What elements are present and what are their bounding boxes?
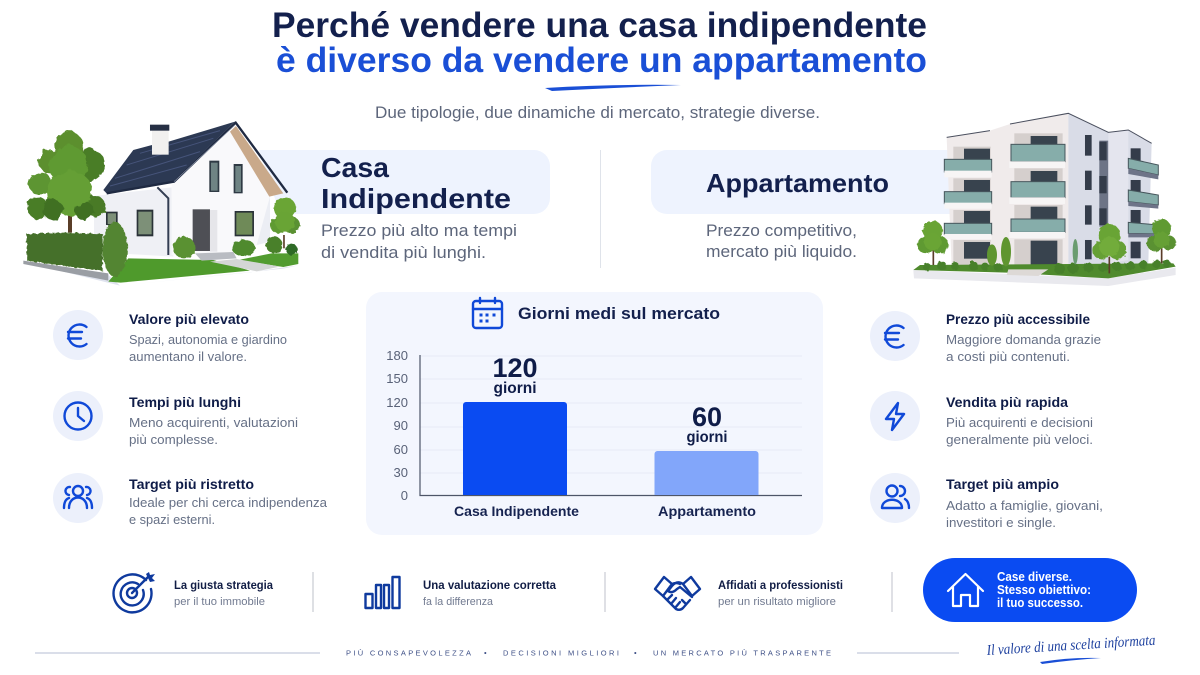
item: valore più elevato <box>53 310 287 364</box>
title: Perché vendere una casa indipendente <box>272 6 927 45</box>
item: valore più elevato: Valore più elevato <box>129 311 249 327</box>
item: vendita più rapida: Vendita più rapida <box>946 394 1068 410</box>
item: target più ristretto <box>53 473 328 527</box>
footer tagline: • <box>484 648 487 658</box>
item: tempi più lunghi: Tempi più lunghi <box>129 394 241 410</box>
tip: la giusta strategia <box>114 572 273 612</box>
item: prezzo più accessibile <box>870 311 1101 364</box>
tip: una valutazione corretta: fa la differenza <box>423 596 494 608</box>
text: casa indipendente description: di vendita più lunghi. <box>321 244 486 262</box>
icon: target <box>114 572 155 612</box>
list: casa indipendente benefits <box>53 310 328 527</box>
footer tagline: PIÙ CONSAPEVOLEZZA <box>346 648 471 658</box>
panel: casa indipendente heading <box>259 150 550 214</box>
tip: la giusta strategia: La giusta strategia <box>174 578 273 592</box>
icon: calendar <box>473 298 502 328</box>
bar: casa indipendente: giorni <box>494 380 536 397</box>
title <box>272 6 927 91</box>
chart title: Giorni medi sul mercato <box>518 304 720 323</box>
item: vendita più rapida: generalmente più veloci. <box>946 432 1093 447</box>
icon: house <box>948 574 983 606</box>
item: valore più elevato: Spazi, autonomia e giardino <box>129 332 287 347</box>
subtitle: Due tipologie, due dinamiche di mercato, strategie diverse. <box>375 103 820 122</box>
y axis <box>386 348 802 503</box>
panel: casa indipendente heading: Indipendente <box>321 183 511 214</box>
tip: affidati a professionisti: Affidati a professionisti <box>718 578 843 592</box>
text: appartamento description <box>706 222 857 261</box>
y axis: 60 <box>394 442 408 457</box>
item: target più ampio: investitori e single. <box>946 515 1056 530</box>
y axis: 180 <box>386 348 408 363</box>
footer tagline: • <box>634 648 637 658</box>
panel: casa indipendente heading: Casa <box>321 152 389 183</box>
list: appartamento benefits <box>870 311 1103 530</box>
item: target più ristretto: Target più ristretto <box>129 476 254 492</box>
item: prezzo più accessibile: Maggiore domanda grazie <box>946 332 1101 347</box>
item: target più ristretto: e spazi esterni. <box>129 512 215 527</box>
tip: una valutazione corretta <box>366 577 556 608</box>
item: vendita più rapida: Più acquirenti e decisioni <box>946 415 1093 430</box>
bar: casa indipendente <box>454 353 579 519</box>
text: appartamento description: Prezzo competitivo, <box>706 222 857 240</box>
text: casa indipendente description: Prezzo più alto ma tempi <box>321 222 517 240</box>
text: appartamento description: mercato più liquido. <box>706 243 857 261</box>
text: casa indipendente description <box>321 222 517 262</box>
y axis: 120 <box>386 395 408 410</box>
y axis: 0 <box>401 488 408 503</box>
bar: appartamento: giorni <box>686 429 728 446</box>
item: target più ampio: Target più ampio <box>946 476 1059 492</box>
icon: handshake <box>655 577 700 610</box>
footer tagline: DECISIONI MIGLIORI <box>503 648 619 658</box>
item: prezzo più accessibile: Prezzo più accessibile <box>946 311 1090 327</box>
panel: appartamento heading: Appartamento <box>706 168 889 198</box>
footer tagline <box>35 648 959 658</box>
footer tagline: UN MERCATO PIÙ TRASPARENTE <box>653 648 831 658</box>
item: prezzo più accessibile: a costi più contenuti. <box>946 349 1070 364</box>
icon: bar chart <box>366 577 400 608</box>
illustration: house <box>23 122 300 286</box>
bar: appartamento: 60 <box>692 402 722 432</box>
panel: bar chart giorni medi sul mercato <box>366 292 823 535</box>
item: target più ristretto: Ideale per chi cerca indipendenza <box>129 495 328 510</box>
title: è diverso da vendere un appartamento <box>276 41 927 80</box>
bar: casa indipendente: 120 <box>492 353 538 383</box>
tip: affidati a professionisti <box>655 577 843 610</box>
callout: case diverse: Stesso obiettivo: <box>997 583 1091 597</box>
item: target più ampio: Adatto a famiglie, giovani, <box>946 498 1103 513</box>
bar: casa indipendente: Casa Indipendente <box>454 503 579 519</box>
item: tempi più lunghi: più complesse. <box>129 432 218 447</box>
tip: affidati a professionisti: per un risultato migliore <box>718 596 836 608</box>
item: tempi più lunghi <box>53 391 298 447</box>
item: tempi più lunghi: Meno acquirenti, valutazioni <box>129 415 298 430</box>
y axis: 90 <box>394 418 408 433</box>
callout: case diverse: Case diverse. <box>997 570 1072 584</box>
y axis: 30 <box>394 465 408 480</box>
y axis: 150 <box>386 371 408 386</box>
bar: appartamento: Appartamento <box>658 503 756 519</box>
item: target più ampio <box>870 473 1103 530</box>
tip: la giusta strategia: per il tuo immobile <box>174 596 265 608</box>
callout: case diverse: il tuo successo. <box>997 596 1083 610</box>
item: valore più elevato: aumentano il valore. <box>129 349 247 364</box>
callout: case diverse <box>923 558 1137 622</box>
panel: appartamento heading <box>651 150 950 214</box>
tip: una valutazione corretta: Una valutazione corretta <box>423 578 556 592</box>
signature: il valore di una scelta informata: Il valore di una scelta informata <box>985 633 1156 659</box>
bar: appartamento <box>654 402 758 519</box>
item: vendita più rapida <box>870 391 1093 447</box>
illustration: apartment building <box>913 113 1176 286</box>
